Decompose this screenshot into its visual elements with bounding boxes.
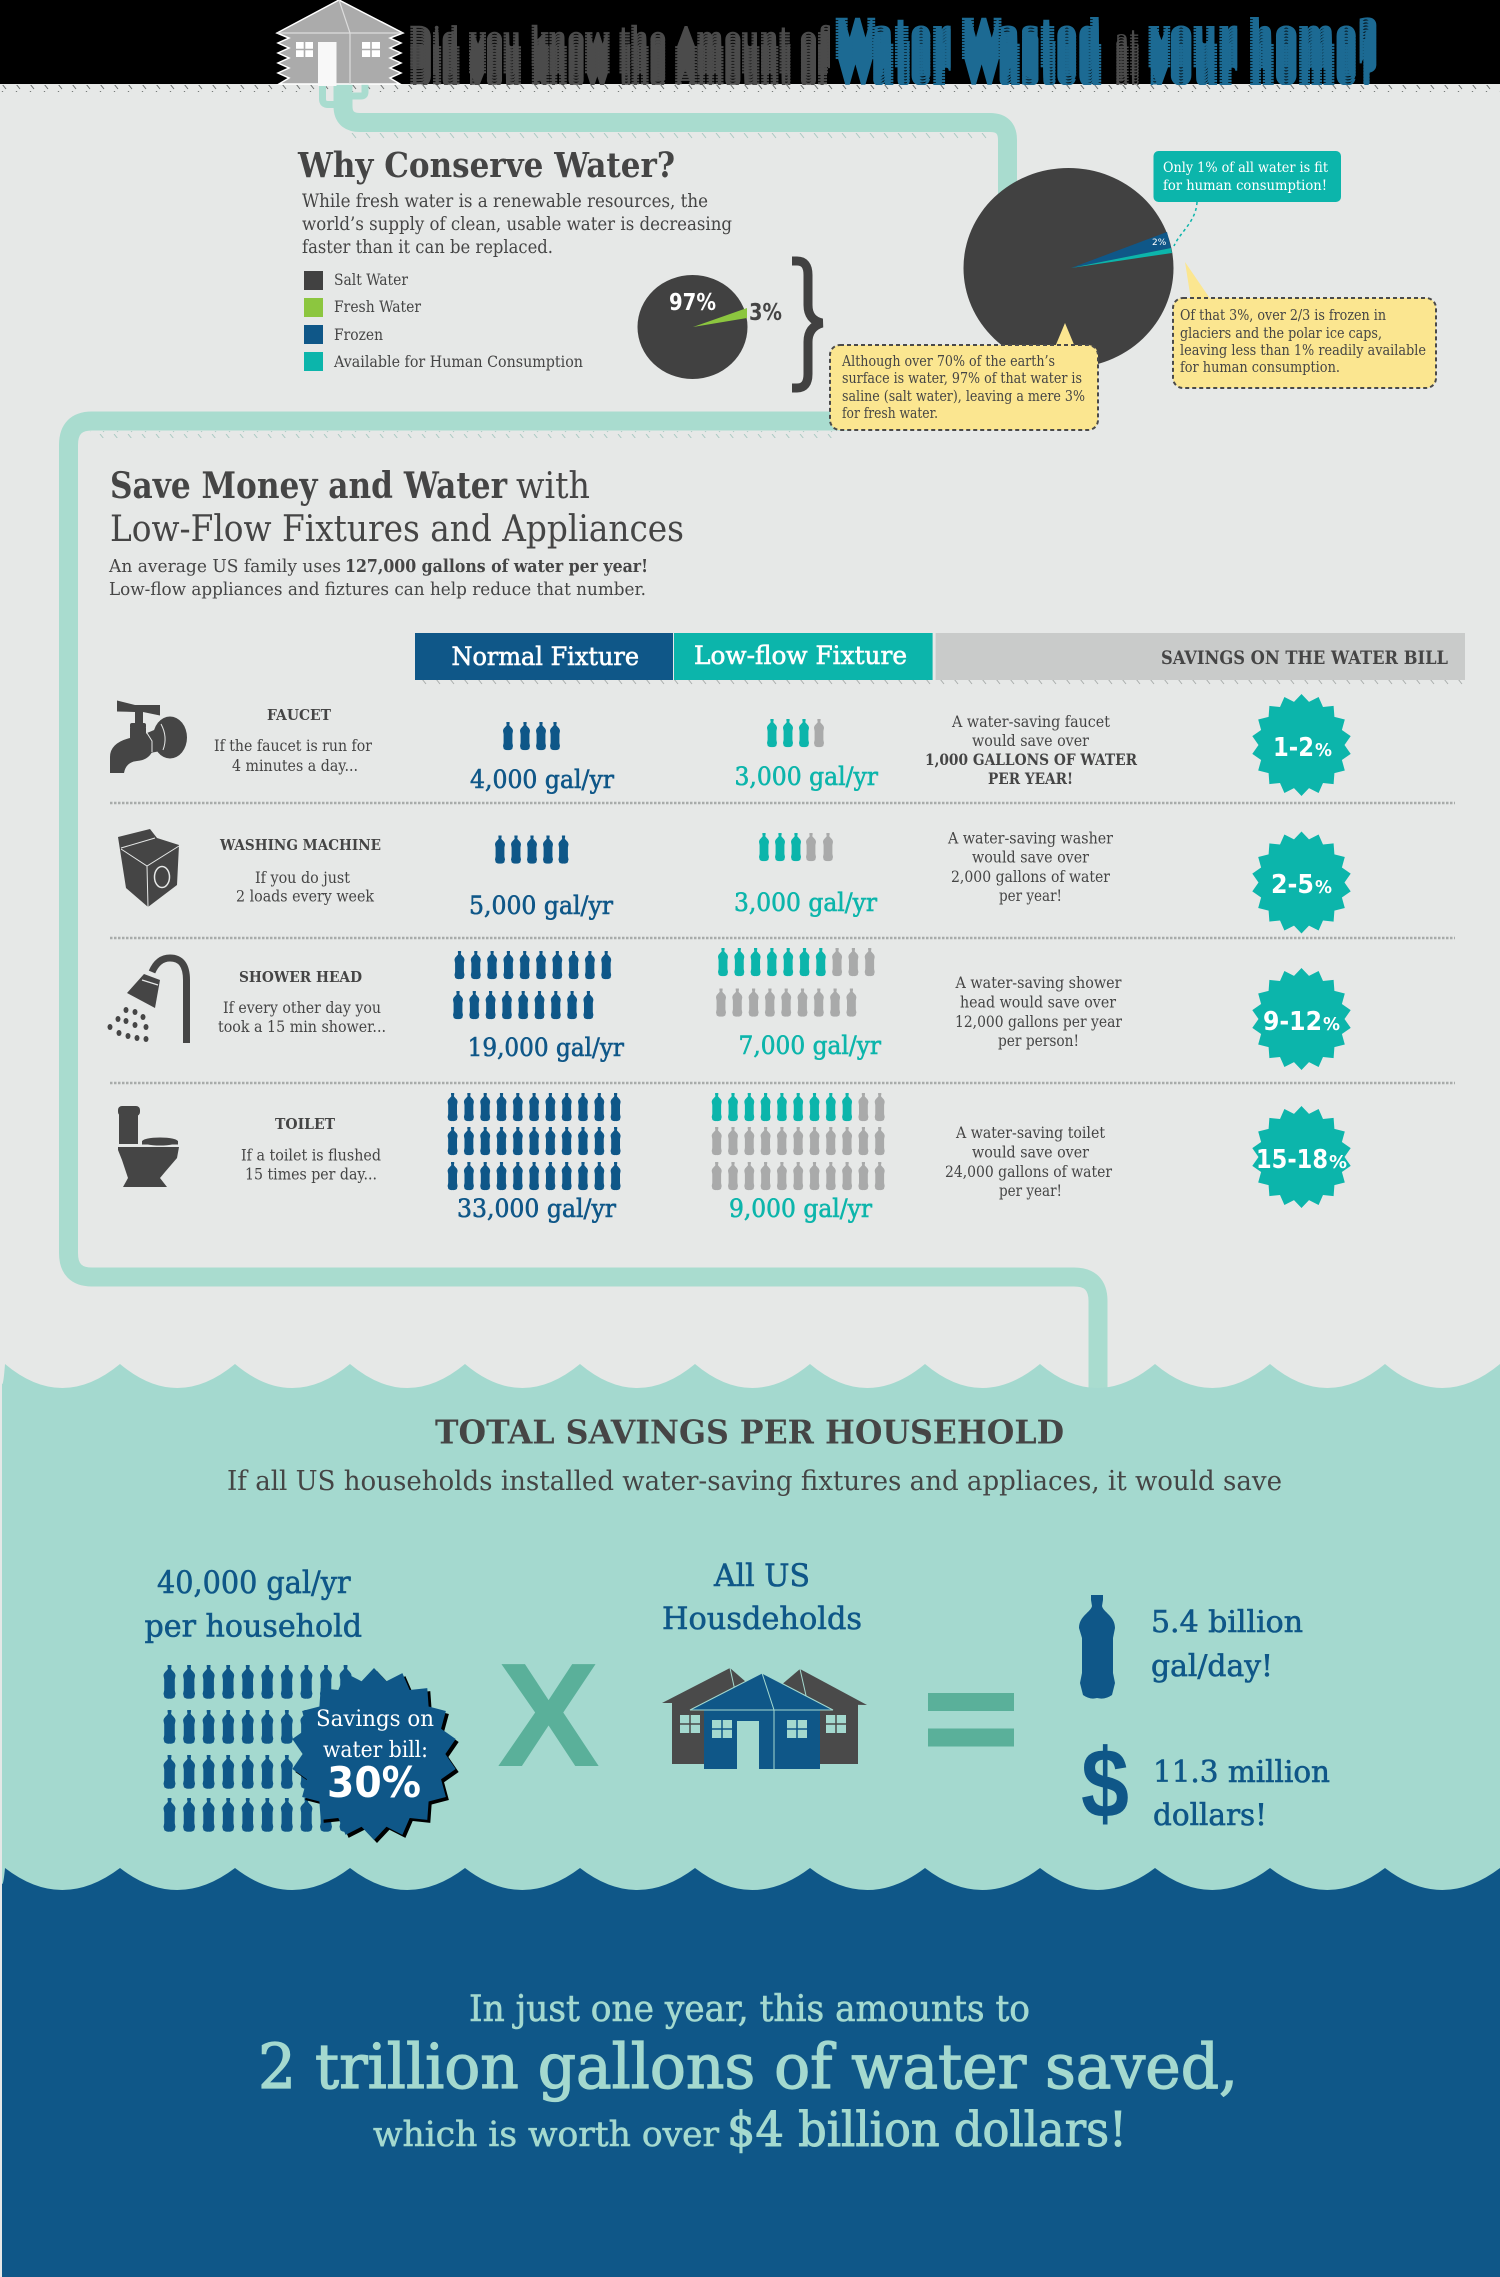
faucet savings badge: % [1315,740,1332,761]
callout: only 1%: for human consumption! [1163,178,1327,194]
callout: although over 70%: saline (salt water), leaving a mere 3% [842,389,1085,405]
washing machine savings badge: 2-5 [1271,870,1314,900]
faucet low-flow value: 3,000 gal/yr [734,762,878,791]
text block: family usage [108,556,648,600]
gallons per day result: gal/day! [1151,1649,1273,1684]
text block: why conserve intro: world’s supply of clean, usable water is decreasing [302,213,732,235]
washing machine savings text: per year! [999,887,1062,905]
dollars result: 11.3 million [1153,1755,1330,1790]
icon: house [277,0,403,86]
savings badge: 30%: water bill: [323,1738,428,1763]
legend [304,270,583,371]
panel: total savings water [0,1364,1500,1900]
all us households label: Housdeholds [662,1601,862,1637]
shower head savings text: A water-saving shower [955,974,1122,992]
legend: Fresh Water [334,297,421,316]
toilet low-flow bottles [712,1093,885,1190]
row dividers [110,803,1455,1083]
callout: of that 3%: Of that 3%, over 2/3 is frozen in [1180,308,1386,324]
washing machine label: WASHING MACHINE [219,836,381,854]
faucet label: FAUCET [267,706,332,724]
pie chart: salt vs fresh [638,275,782,379]
toilet savings text: would save over [972,1144,1090,1162]
washing machine normal value: 5,000 gal/yr [469,891,613,920]
faucet normal bottles [503,722,560,750]
heading: save money and water [110,465,684,550]
toilet savings badge: 15-18 [1256,1145,1328,1175]
shower head label: took a 15 min shower... [218,1018,386,1036]
savings badge: 30% [292,1668,459,1843]
shower head label: SHOWER HEAD [239,968,362,986]
per household value: 40,000 gal/yr [157,1565,351,1601]
toilet label: If a toilet is flushed [241,1146,381,1164]
pipe from house around why-conserve section [322,84,1008,200]
table header: Low-flow Fixture [694,641,907,670]
table header [415,633,1465,686]
callout: although over 70%: Although over 70% of the earth’s [841,354,1055,370]
closing statement: $4 billion dollars! [727,2102,1127,2158]
faucet label: If the faucet is run for [214,737,373,755]
callout: only 1% [1154,151,1341,246]
callout: of that 3%: leaving less than 1% readily available [1180,343,1426,359]
callout: although over 70% [830,323,1098,430]
toilet label: 15 times per day... [245,1166,377,1184]
faucet savings text: A water-saving faucet [951,713,1111,731]
per household value [144,1565,362,1645]
faucet label: 4 minutes a day... [232,757,358,775]
pie chart: salt vs fresh: 3% [749,300,782,326]
shower head savings badge: % [1323,1014,1340,1035]
title: Did you know the Amount of [409,21,830,56]
table header: Normal Fixture [452,642,639,671]
washing machine low-flow value: 3,000 gal/yr [734,888,877,917]
toilet savings badge: % [1329,1152,1347,1173]
title [409,10,1378,56]
legend: Available for Human Consumption [333,352,583,371]
icon: dollar sign: $ [1081,1728,1129,1838]
per household value: per household [144,1609,362,1645]
text block: family usage: An average US family uses [108,556,341,577]
toilet savings text: A water-saving toilet [955,1124,1106,1142]
pipe outlet into water [1088,1340,1108,1386]
toilet savings text: per year! [999,1182,1062,1200]
washing machine label: If you do just [255,869,351,887]
faucet low-flow bottles [767,719,824,747]
row: shower head [108,948,1351,1070]
washing machine low-flow bottles [759,833,833,861]
table header: SAVINGS ON THE WATER BILL [1161,647,1448,669]
callout: although over 70%: for fresh water. [842,406,938,422]
washing machine savings badge [1252,832,1351,934]
toilet normal bottles [448,1093,621,1190]
equals sign [928,1693,1014,1746]
closing statement: 2 trillion gallons of water saved, [258,2030,1238,2103]
heading: total savings per household: TOTAL SAVINGS PER HOUSEHOLD [435,1412,1064,1452]
icon: houses [662,1668,867,1769]
all us households label [662,1558,862,1637]
savings badge: 30%: 30% [327,1758,421,1807]
washing machine savings text: A water-saving washer [947,830,1114,848]
row: toilet [118,1093,1351,1223]
heading: save money and water: Low-Flow Fixtures and Appliances [110,509,684,550]
toilet normal value: 33,000 gal/yr [457,1194,616,1223]
legend: Frozen [334,325,383,344]
shower head label [218,968,386,1036]
shower head normal bottles [453,951,611,1019]
row: washing machine [118,829,1351,934]
shower head label: If every other day you [223,999,381,1017]
text block: family usage: 127,000 gallons of water per year! [345,556,648,577]
callout: of that 3%: glaciers and the polar ice caps, [1180,326,1382,342]
faucet savings badge: 1-2 [1273,733,1314,763]
text block: family usage: Low-flow appliances and fiztures can help reduce that number. [109,579,646,600]
household bottles [164,1665,352,1832]
washing machine savings text: 2,000 gallons of water [951,868,1111,886]
heading: save money and water: with [516,466,590,507]
faucet savings text: would save over [972,732,1090,750]
toilet low-flow value: 9,000 gal/yr [729,1194,872,1223]
text block: all households: If all US households installed water-saving fixtures and appliaces, it would save [227,1466,1282,1497]
left edge strip [0,1364,2,2277]
icon: washing machine [118,829,179,907]
title: at [1115,25,1140,55]
callout: of that 3% [1173,262,1436,388]
faucet savings text: PER YEAR! [988,769,1073,788]
pie chart: fresh water breakdown [964,168,1174,368]
legend: Salt Water [334,270,408,289]
faucet savings text: 1,000 GALLONS OF WATER [925,750,1137,769]
callout: although over 70%: surface is water, 97% of that water is [842,371,1082,387]
text block: why conserve intro [302,190,732,258]
callout: only 1%: Only 1% of all water is fit [1163,160,1328,176]
washing machine normal bottles [495,836,568,864]
icon: toilet [118,1106,179,1187]
closing statement: which is worth over [373,2115,719,2155]
title: Water Wasted [835,10,1102,55]
washing machine savings badge: % [1315,877,1332,898]
all us households label: All US [713,1558,810,1594]
icon: large bottle [1079,1595,1115,1699]
faucet savings badge [1252,694,1351,796]
shower head savings text: per person! [998,1032,1079,1050]
multiply sign: X [497,1633,600,1798]
dollars result [1153,1755,1330,1833]
text block: why conserve intro: While fresh water is a renewable resources, the [302,190,708,212]
toilet label: TOILET [275,1115,336,1133]
header band [0,0,1500,92]
washing machine savings text [947,830,1114,905]
icon: faucet [110,700,187,773]
dollars result: dollars! [1153,1798,1267,1833]
toilet savings badge [1252,1106,1351,1208]
gallons per day result [1151,1605,1303,1684]
heading: why conserve water: Why Conserve Water? [297,145,675,186]
pipe around fixtures section [68,421,1098,1395]
shower head normal value: 19,000 gal/yr [468,1033,624,1062]
pie chart: fresh water breakdown: 2% [1152,238,1167,248]
gallons per day result: 5.4 billion [1151,1605,1303,1640]
washing machine savings text: would save over [972,848,1090,866]
brace [792,261,822,388]
shower head savings badge [1252,968,1351,1070]
pie chart: salt vs fresh: 97% [669,290,716,316]
washing machine label: 2 loads every week [236,888,375,906]
toilet label [241,1115,381,1184]
shower head savings text: 12,000 gallons per year [955,1013,1123,1031]
shower head low-flow value: 7,000 gal/yr [738,1031,881,1060]
toilet savings text: 24,000 gallons of water [945,1163,1113,1181]
callout: of that 3%: for human consumption. [1180,360,1340,376]
shower head savings badge: 9-12 [1263,1007,1322,1037]
panel: annual total [0,1868,1500,2277]
icon: shower head [108,958,186,1043]
washing machine label [219,836,381,906]
faucet normal value: 4,000 gal/yr [470,765,614,794]
shower head savings text [955,974,1123,1050]
closing statement: In just one year, this amounts to [469,1989,1030,2030]
row: faucet [110,694,1351,796]
shower head low-flow bottles [716,948,875,1017]
savings badge: 30%: Savings on [316,1707,434,1732]
toilet savings text [945,1124,1113,1200]
faucet savings text [925,713,1137,788]
closing statement [258,1989,1238,2158]
title: your home? [1148,10,1378,55]
heading: save money and water: Save Money and Water [110,465,508,507]
shower head savings text: head would save over [960,994,1117,1012]
text block: why conserve intro: faster than it can be replaced. [302,236,553,258]
faucet label [214,706,373,775]
